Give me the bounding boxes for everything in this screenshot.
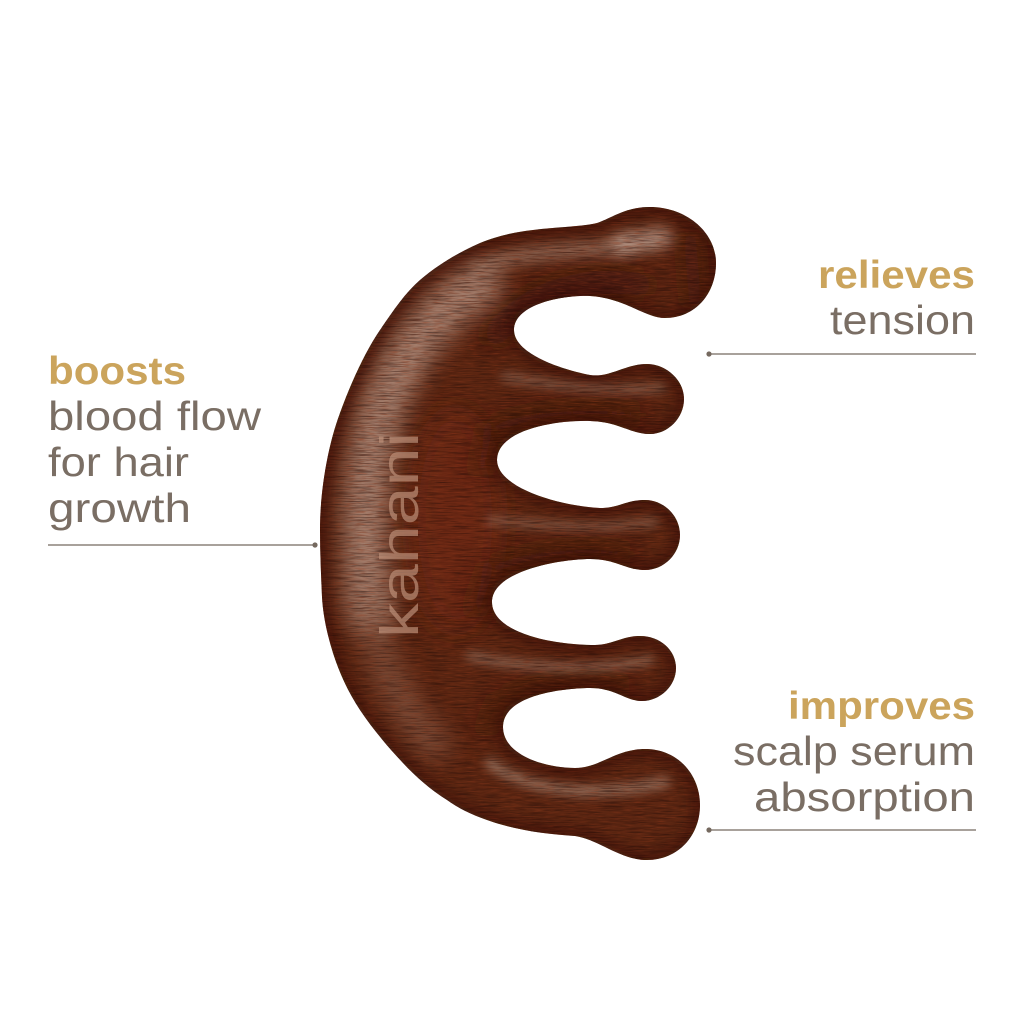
callout: boosts blood flow for hair growth: growth <box>48 485 191 531</box>
callout: boosts blood flow for hair growth: for hair <box>48 439 189 485</box>
callout: improves scalp serum absorption: absorption <box>754 774 975 820</box>
callout: improves scalp serum absorption <box>706 685 976 833</box>
callout: relieves tension <box>706 254 976 357</box>
wood grain <box>310 200 730 870</box>
callout: improves scalp serum absorption: scalp serum <box>733 728 975 774</box>
pale sheen along the back of the comb <box>365 285 480 610</box>
soft shaded rim <box>320 207 716 860</box>
callout: boosts blood flow for hair growth <box>48 350 318 548</box>
engraved logo: kahani: kahani <box>370 432 430 638</box>
callout: boosts blood flow for hair growth: boosts <box>48 350 186 393</box>
darker shoulder tones where the fingers meet the body <box>475 240 695 730</box>
warm centre glow <box>410 410 500 630</box>
finger sheens <box>470 238 665 791</box>
callout: boosts blood flow for hair growth: blood flow <box>48 393 261 439</box>
callout: relieves tension: relieves <box>818 254 975 297</box>
product: wooden scalp massager comb <box>310 200 730 870</box>
callout: improves scalp serum absorption: improves <box>788 685 975 728</box>
callout: relieves tension: tension <box>830 297 975 343</box>
